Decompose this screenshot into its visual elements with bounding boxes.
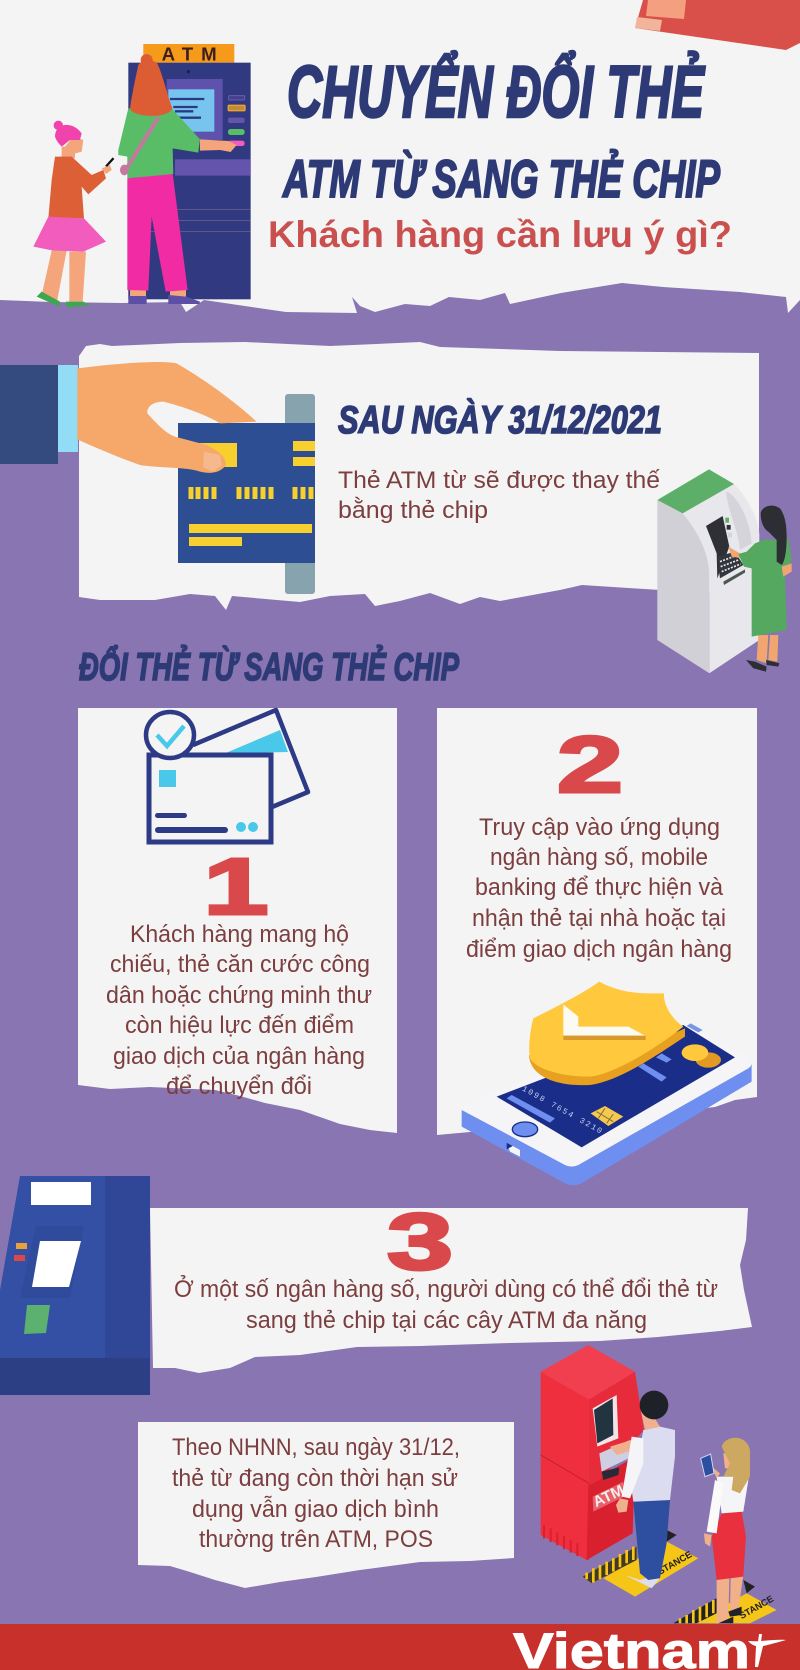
illustration: people at ATM	[33, 44, 251, 308]
step 1 text: chiếu, thẻ căn cước công	[110, 951, 370, 978]
icon: phone with shield: 1098 7654 3210	[520, 1085, 603, 1136]
woman	[701, 1438, 750, 1623]
panel text: Thẻ ATM từ sẽ được thay thế	[338, 467, 661, 494]
icon: phone with shield	[462, 982, 752, 1185]
step 3 text	[174, 1274, 718, 1334]
panel: step 3	[150, 1197, 752, 1373]
illustration: grey ATM with woman	[657, 469, 792, 673]
woman in green dress	[728, 506, 792, 672]
panel: step 2	[437, 708, 757, 1185]
slot	[285, 394, 315, 594]
illustration: blue ATM	[0, 1176, 150, 1395]
panel text	[338, 467, 661, 524]
icon: hand holding card	[0, 362, 315, 563]
note text: Theo NHNN, sau ngày 31/12,	[172, 1434, 460, 1461]
number 3: 3	[387, 1197, 453, 1286]
red machine	[541, 1345, 644, 1560]
panel: step 1	[78, 708, 397, 1133]
floor mats	[583, 1530, 777, 1623]
step 1 text: giao dịch của ngân hàng	[113, 1043, 365, 1070]
cuff	[0, 365, 58, 464]
red machine: ATM	[590, 1482, 627, 1511]
panel: after 31/12/2021	[0, 342, 759, 610]
step 2 text: Truy cập vào ứng dụng	[479, 814, 720, 841]
floor mats: STANCE	[656, 1549, 694, 1577]
title	[268, 52, 732, 255]
adult woman	[118, 54, 237, 304]
header paper	[0, 0, 800, 313]
ATM sign	[143, 44, 234, 65]
step 3 text: sang thẻ chip tại các cây ATM đa năng	[246, 1307, 647, 1334]
note text: thường trên ATM, POS	[199, 1526, 433, 1553]
note panel	[138, 1422, 514, 1588]
step 1 text	[106, 921, 372, 1100]
hand	[77, 362, 257, 473]
number 1: 1	[204, 842, 268, 931]
number 2: 2	[557, 720, 623, 809]
step 2 text: nhận thẻ tại nhà hoặc tại	[472, 905, 726, 932]
panel heading: SAU NGÀY 31/12/2021	[338, 398, 662, 442]
ATM sign: ATM	[162, 44, 217, 65]
footer bar	[0, 1623, 800, 1670]
illustration: red ATM with customers	[541, 1345, 777, 1623]
step 1 text: dân hoặc chứng minh thư	[106, 982, 372, 1009]
panel text: bằng thẻ chip	[338, 497, 488, 524]
step 3 text: Ở một số ngân hàng số, người dùng có thể đổi thẻ từ	[174, 1274, 718, 1303]
bank card	[178, 423, 315, 563]
step 2 text	[466, 814, 732, 963]
floor mats: STANCE	[738, 1594, 775, 1621]
step 2 text: ngân hàng số, mobile	[490, 844, 708, 871]
section heading: ĐỔI THẺ TỪ SANG THẺ CHIP	[79, 644, 460, 689]
note text	[172, 1434, 460, 1553]
grey machine	[657, 469, 759, 673]
shield	[529, 982, 685, 1085]
subtitle: Khách hàng cần lưu ý gì?	[268, 214, 732, 255]
step 1 text: Khách hàng mang hộ	[130, 921, 349, 948]
note text: dụng vẫn giao dịch bình	[192, 1496, 439, 1523]
step 2 text: banking để thực hiện và	[475, 874, 724, 901]
torn red corner decoration	[635, 0, 800, 50]
icon: ID cards	[146, 710, 308, 842]
step 1 text: để chuyển đổi	[166, 1073, 312, 1100]
note text: thẻ từ đang còn thời hạn sử	[172, 1465, 458, 1492]
step 1 text: còn hiệu lực đến điểm	[125, 1012, 354, 1039]
man	[610, 1391, 675, 1588]
step 2 text: điểm giao dịch ngân hàng	[466, 936, 732, 963]
girl with phone	[33, 121, 114, 308]
ATM machine body	[128, 63, 251, 299]
